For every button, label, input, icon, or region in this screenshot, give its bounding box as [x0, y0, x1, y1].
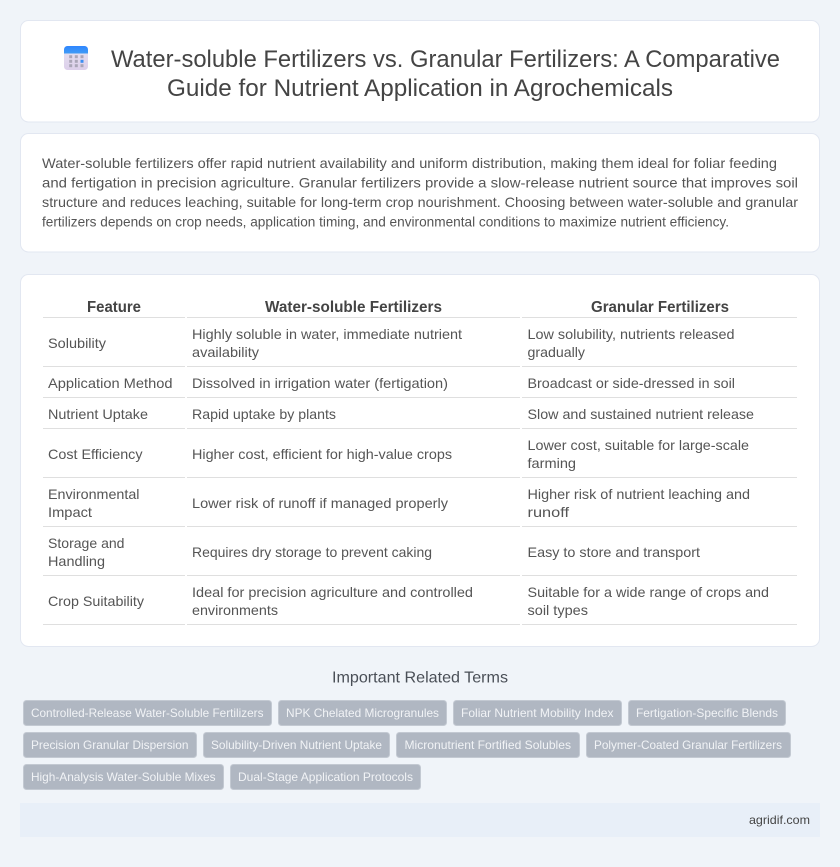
row: storage and handling: Storage and	[48, 535, 124, 551]
row: environmental impact: Lower risk of runoff if managed properly	[192, 495, 448, 511]
tag: controlled-release: Controlled-Release Water-Soluble Fertilizers	[31, 706, 264, 720]
row: application method	[43, 375, 797, 398]
icon: calendar	[64, 46, 88, 70]
tag: dual-stage: Dual-Stage Application Protocols	[238, 770, 413, 784]
intro paragraph: structure and reduces leaching, suitable for long-term crop nourishment. Choosing between water-soluble and granular	[42, 194, 798, 210]
row: storage and handling	[43, 535, 797, 576]
row: cost efficiency: Higher cost, efficient for high-value crops	[192, 446, 452, 462]
title	[111, 46, 780, 102]
row: solubility: availability	[192, 344, 259, 360]
tag: polymer	[586, 732, 790, 758]
title: Water-soluble Fertilizers vs. Granular Fertilizers: A Comparative	[111, 46, 780, 73]
tag: fertigation	[628, 700, 786, 726]
intro paragraph: Water-soluble fertilizers offer rapid nutrient availability and uniform distribution, making them ideal for foliar feeding	[42, 155, 777, 171]
row: environmental impact	[43, 486, 797, 527]
row: cost efficiency: Lower cost, suitable for large-scale	[528, 437, 749, 453]
footer	[20, 803, 820, 837]
tag: foliar: Foliar Nutrient Mobility Index	[461, 706, 614, 720]
header panel	[20, 20, 820, 122]
tag: high-analysis	[24, 764, 224, 790]
row: cost efficiency: farming	[528, 455, 576, 471]
row: crop suitability: Suitable for a wide range of crops and	[528, 584, 769, 600]
row: solubility: Low solubility, nutrients released	[528, 326, 734, 342]
row: solubility: Solubility	[48, 335, 106, 351]
title: Guide for Nutrient Application in Agrochemicals	[167, 75, 673, 102]
tag: polymer: Polymer-Coated Granular Fertilizers	[594, 738, 782, 752]
row: application method: Application Method	[48, 375, 172, 391]
row: nutrient uptake	[43, 406, 797, 429]
row: storage and handling: Handling	[48, 553, 105, 569]
tag: precision	[24, 732, 196, 758]
table header row: Granular Fertilizers	[591, 299, 729, 316]
tag: NPK	[278, 700, 446, 726]
tag: controlled-release	[24, 700, 272, 726]
tag: NPK: NPK Chelated Microgranules	[286, 706, 439, 720]
tag: dual-stage	[230, 764, 420, 790]
tag: foliar	[454, 700, 622, 726]
row: storage and handling: Requires dry storage to prevent caking	[192, 544, 432, 560]
row: environmental impact: Environmental	[48, 486, 140, 502]
row: nutrient uptake: Nutrient Uptake	[48, 406, 148, 422]
tag: micronutrient: Micronutrient Fortified Solubles	[404, 738, 571, 752]
panel: introduction	[20, 134, 820, 252]
table header row	[43, 299, 797, 318]
tag: solubility-driven	[204, 732, 390, 758]
row: crop suitability: soil types	[528, 602, 588, 618]
tag: micronutrient	[396, 732, 580, 758]
row: application method: Broadcast or side-dressed in soil	[528, 375, 735, 391]
row: crop suitability: Crop Suitability	[48, 593, 144, 609]
row: storage and handling: Easy to store and transport	[528, 544, 700, 560]
panel: comparison table	[20, 274, 820, 646]
intro paragraph	[42, 155, 798, 230]
row: crop suitability	[43, 584, 797, 625]
related terms tags	[24, 700, 790, 790]
row: nutrient uptake: Rapid uptake by plants	[192, 406, 336, 422]
tag: fertigation: Fertigation-Specific Blends	[636, 706, 778, 720]
row: application method: Dissolved in irrigation water (fertigation)	[192, 375, 448, 391]
row: nutrient uptake: Slow and sustained nutrient release	[528, 406, 754, 422]
row: solubility: Highly soluble in water, immediate nutrient	[192, 326, 462, 342]
heading: important related terms: Important Related Terms	[332, 670, 508, 686]
row: cost efficiency: Cost Efficiency	[48, 446, 142, 462]
intro paragraph: fertilizers depends on crop needs, application timing, and environmental conditions to maximize nutrient efficiency.	[42, 214, 729, 230]
row: crop suitability: Ideal for precision agriculture and controlled	[192, 584, 473, 600]
intro paragraph: and fertigation in precision agriculture. Granular fertilizers provide a slow-release nutrient source that improves soil	[42, 174, 798, 190]
tag: high-analysis: High-Analysis Water-Soluble Mixes	[31, 770, 216, 784]
row: cost efficiency	[43, 437, 797, 478]
tag: precision: Precision Granular Dispersion	[31, 738, 188, 752]
row: solubility: gradually	[528, 344, 585, 360]
row: crop suitability: environments	[192, 602, 278, 618]
row: environmental impact: runoff	[528, 504, 569, 520]
row: environmental impact: Higher risk of nutrient leaching and	[528, 486, 750, 502]
row: environmental impact: Impact	[48, 504, 92, 520]
footer: agridif.com	[749, 813, 810, 827]
table header row: Water-soluble Fertilizers	[265, 299, 442, 316]
table header row: Feature	[87, 299, 141, 316]
tag: solubility-driven: Solubility-Driven Nutrient Uptake	[211, 738, 382, 752]
row: solubility	[43, 326, 797, 367]
